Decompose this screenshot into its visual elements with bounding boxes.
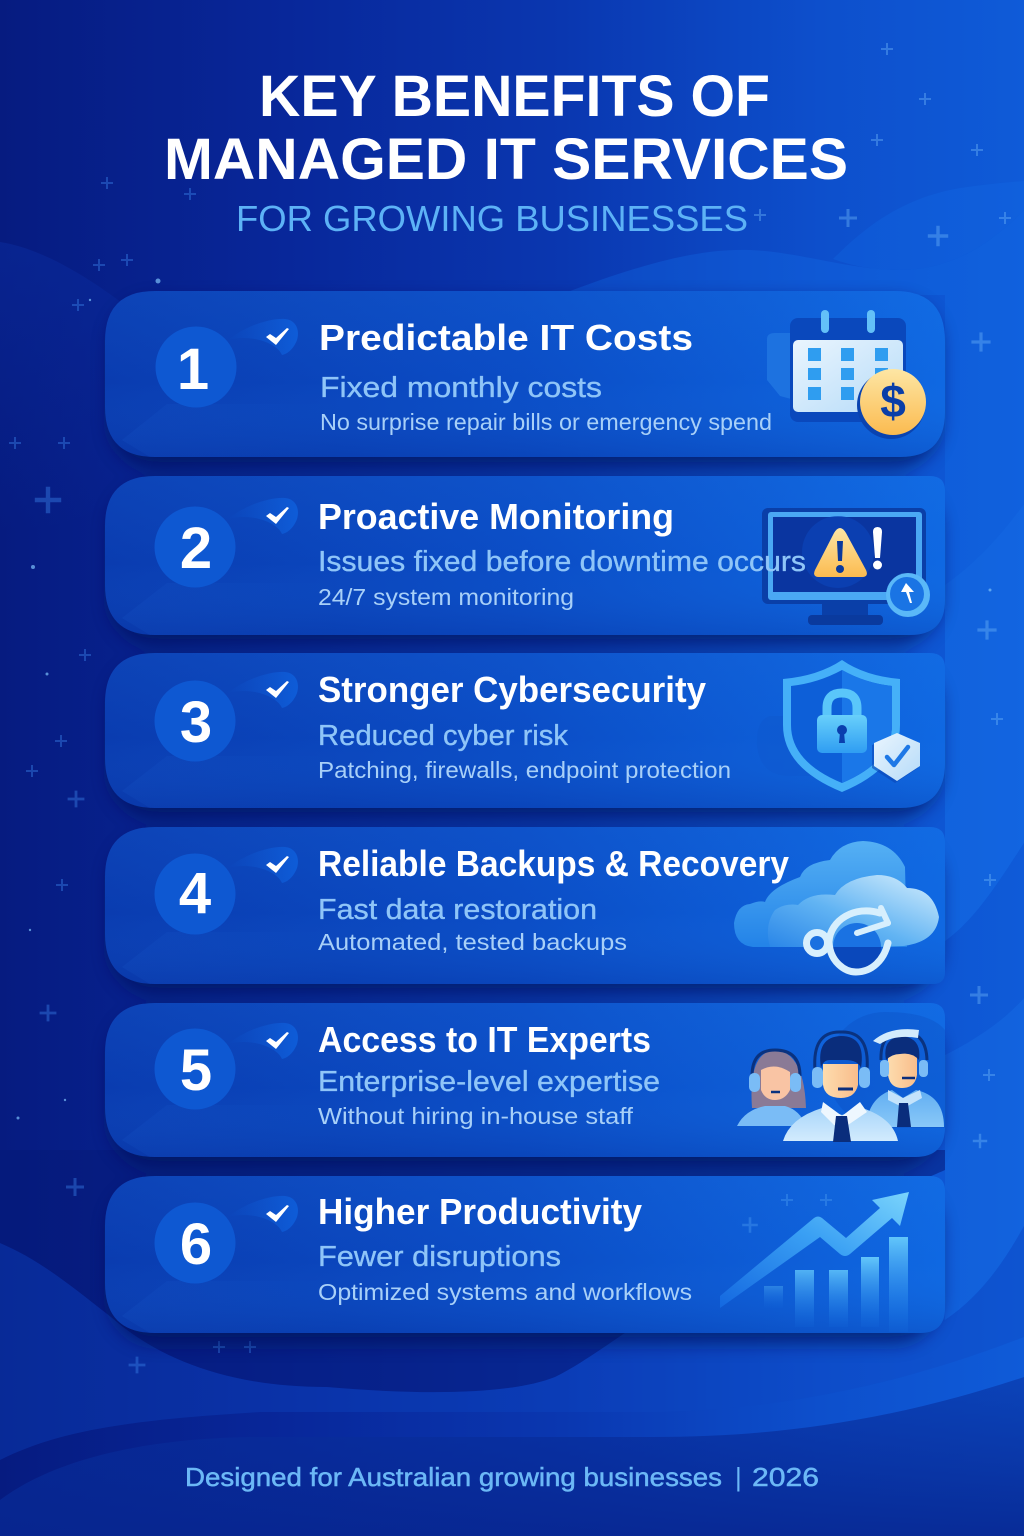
benefit 6 text: Optimized systems and workflows (318, 1279, 692, 1305)
icon: calendar with dollar coin: $ (880, 375, 906, 427)
panel: benefit 3 (105, 653, 945, 808)
number badge 3 (154, 680, 236, 762)
footer: Designed for Australian growing businesses (185, 1462, 722, 1492)
number badge 2: 2 (180, 516, 212, 581)
icon: cloud with restore arrow (734, 841, 939, 972)
number badge 1 (156, 326, 236, 408)
centre man agent (783, 1032, 898, 1142)
benefit 5 text: Access to IT Experts (318, 1019, 651, 1060)
title: MANAGED IT SERVICES (164, 127, 848, 192)
right man agent (866, 1029, 944, 1127)
benefit 2 text: 24/7 system monitoring (318, 584, 574, 610)
benefit 5 text (318, 1019, 660, 1129)
benefit 4 text: Automated, tested backups (318, 929, 627, 955)
number badge 5 (154, 1028, 236, 1110)
icon: calendar with dollar coin (767, 310, 926, 439)
panel: benefit 2 (105, 476, 945, 635)
check icon 6 (228, 1196, 298, 1232)
title: KEY BENEFITS OF (259, 64, 770, 129)
check icon 1 (228, 319, 298, 355)
panel: benefit 1 (105, 291, 945, 457)
number badge 6 (154, 1202, 236, 1284)
woman agent (737, 1050, 806, 1126)
benefit 4 text: Fast data restoration (318, 894, 597, 926)
panel: benefit 5 (105, 1003, 945, 1157)
title (164, 64, 848, 192)
benefit 1 text: No surprise repair bills or emergency spend (320, 409, 772, 435)
benefit 6 text: Fewer disruptions (318, 1241, 561, 1273)
number badge 6: 6 (180, 1212, 212, 1277)
benefit 5 text: Without hiring in-house staff (318, 1103, 634, 1129)
benefit 1 text: Predictable IT Costs (319, 317, 693, 358)
number badge 2 (154, 506, 236, 588)
check icon 2 (228, 498, 298, 534)
subtitle: FOR GROWING BUSINESSES (236, 198, 748, 239)
benefit 2 text (318, 496, 806, 610)
benefit 6 text: Higher Productivity (318, 1191, 642, 1232)
footer: 2026 (752, 1462, 819, 1492)
panel: benefit 6 (105, 1176, 945, 1333)
benefit 2 text: Issues fixed before downtime occurs (318, 546, 806, 578)
benefit 2 text: Proactive Monitoring (318, 496, 674, 537)
icon: monitor with alert (762, 508, 930, 625)
benefit 4 text (318, 843, 789, 955)
icon: shield with lock (757, 660, 920, 792)
number badge 4: 4 (179, 861, 211, 926)
footer: | (735, 1462, 742, 1492)
panel: benefit 4 (105, 827, 945, 984)
benefit 1 text (319, 317, 772, 435)
benefit 3 text (318, 669, 731, 783)
icon: IT support team (737, 1012, 945, 1142)
benefit 3 text: Reduced cyber risk (318, 720, 568, 752)
number badge 5: 5 (180, 1038, 212, 1103)
number badge 1: 1 (177, 337, 209, 402)
benefit 6 text (318, 1191, 692, 1305)
icon: growth chart with arrow (720, 1192, 909, 1332)
number badge 4 (154, 854, 236, 934)
benefit 5 text: Enterprise-level expertise (318, 1066, 660, 1098)
check icon 4 (228, 847, 298, 883)
benefit 3 text: Stronger Cybersecurity (318, 669, 706, 710)
benefit 1 text: Fixed monthly costs (320, 372, 602, 404)
number badge 3: 3 (180, 690, 212, 755)
check icon 3 (228, 672, 298, 708)
benefit 4 text: Reliable Backups & Recovery (318, 843, 789, 884)
check icon 5 (228, 1023, 298, 1059)
benefit 3 text: Patching, firewalls, endpoint protection (318, 757, 731, 783)
